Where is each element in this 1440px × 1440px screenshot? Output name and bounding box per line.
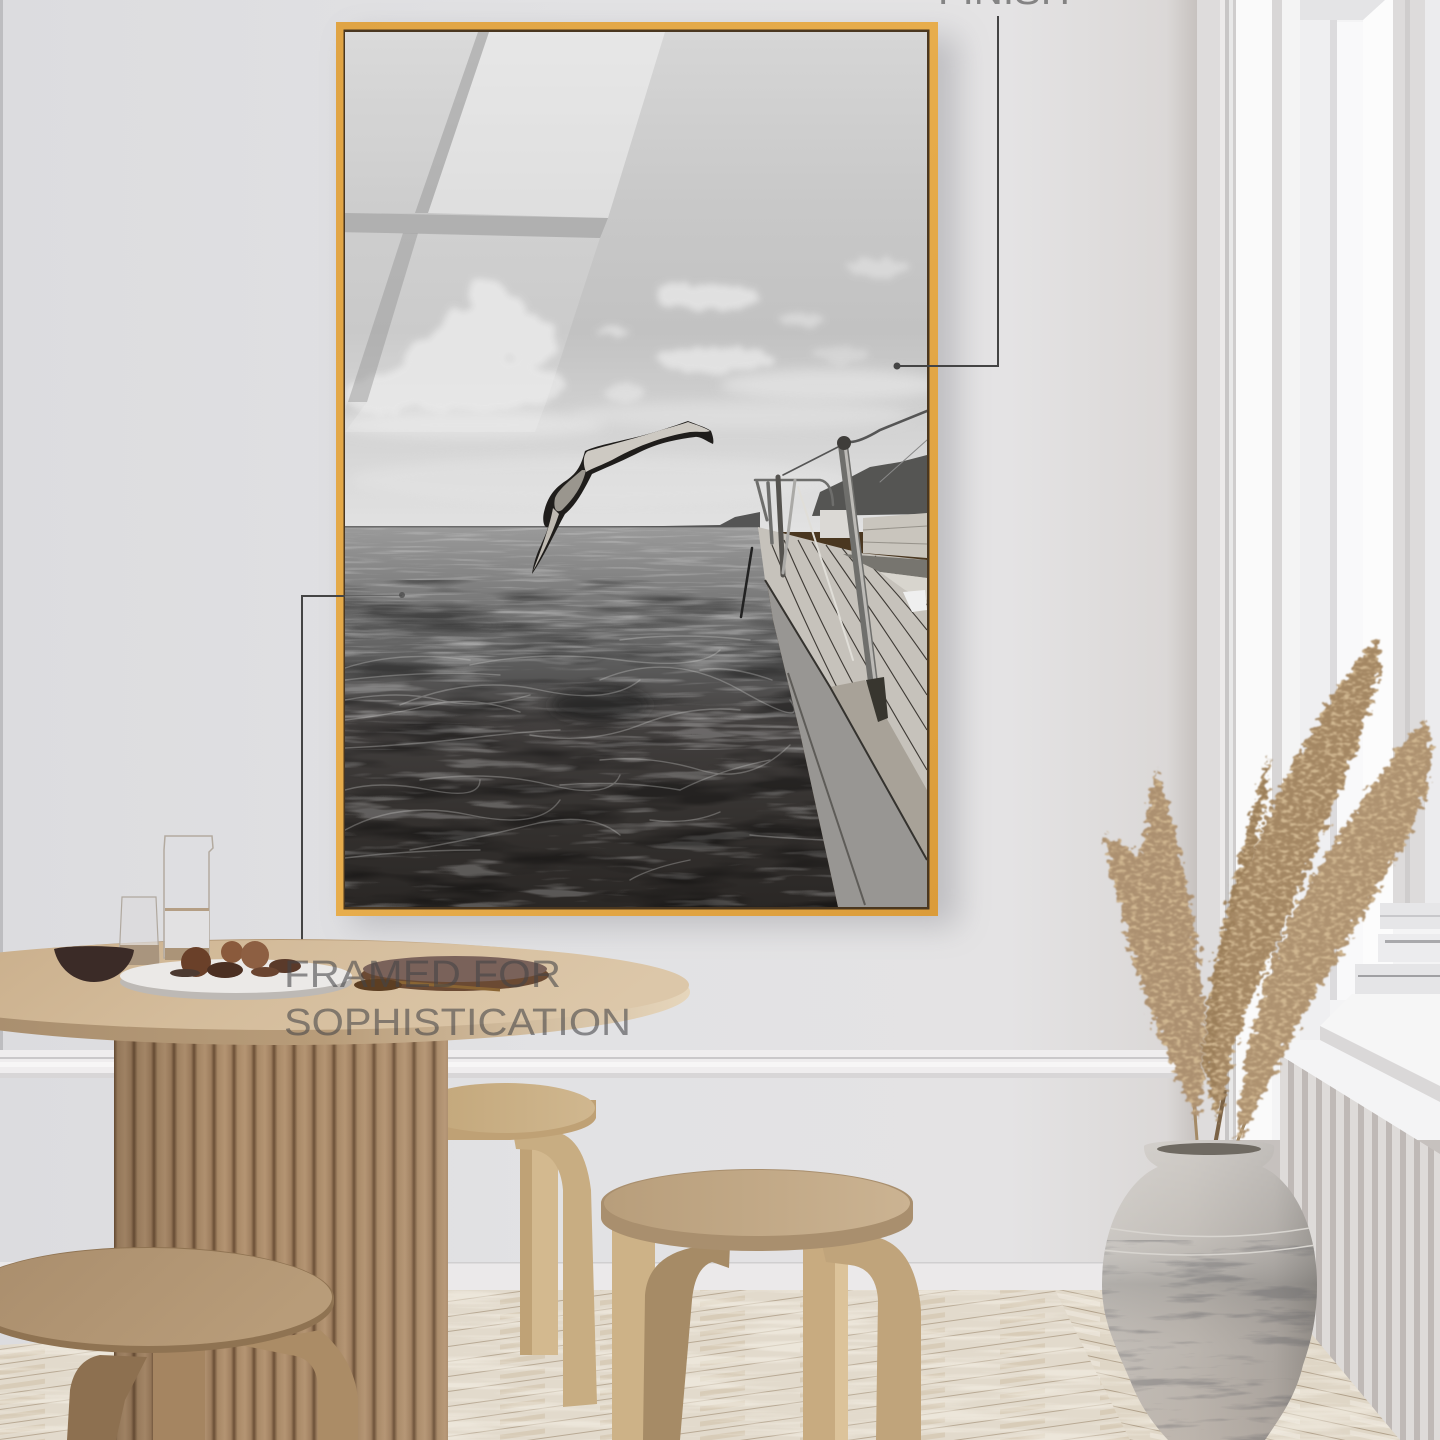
distant headland bbox=[605, 512, 760, 527]
dark inner liner bbox=[344, 30, 930, 910]
callout label: framed for sophistication: SOPHISTICATION bbox=[284, 1002, 631, 1044]
drinking glass bbox=[119, 897, 159, 965]
hull stripe bbox=[788, 673, 865, 905]
bowl bbox=[54, 946, 134, 982]
callout leader: frame bbox=[302, 592, 405, 946]
stone vase bbox=[1100, 1140, 1320, 1440]
floor bbox=[0, 1290, 1400, 1440]
water jug bbox=[164, 836, 213, 960]
photo content bbox=[335, 32, 940, 907]
table edge bbox=[0, 939, 690, 1045]
callout label: framed for sophistication bbox=[284, 954, 631, 1044]
baseboard bbox=[0, 1262, 1278, 1290]
pampas grass plumes bbox=[1105, 636, 1432, 1145]
diver bbox=[532, 421, 713, 574]
window sill bbox=[1320, 994, 1440, 1086]
front left stool bbox=[0, 1247, 358, 1440]
waves bbox=[340, 527, 845, 907]
callout leader: finish bbox=[894, 16, 998, 370]
hull bbox=[768, 586, 927, 907]
teak deck bbox=[758, 527, 927, 860]
books on the window sill bbox=[1355, 934, 1440, 994]
glass reflection bbox=[345, 32, 665, 432]
deck boxes bbox=[820, 510, 927, 558]
callout label: framed for sophistication: FRAMED FOR bbox=[284, 954, 561, 996]
frame shadow bbox=[352, 36, 958, 926]
wooden spoon bbox=[354, 979, 500, 991]
radiator bbox=[1280, 1055, 1440, 1440]
dining table bbox=[0, 939, 690, 1440]
table pedestal bbox=[114, 1030, 448, 1440]
dark serving plate bbox=[361, 956, 549, 991]
rail stanchion bbox=[837, 436, 888, 722]
front right stool bbox=[601, 1169, 921, 1440]
bow railing bbox=[741, 411, 927, 660]
horizon line bbox=[345, 526, 760, 528]
chair rail bbox=[0, 1050, 1180, 1078]
window with white moulding bbox=[1197, 0, 1440, 1140]
outer gold frame bbox=[336, 22, 938, 916]
sill front edge bbox=[1320, 1026, 1440, 1102]
sky bbox=[345, 32, 927, 532]
back stool bbox=[415, 1083, 597, 1407]
clouds bbox=[345, 257, 927, 438]
marble plate with nuts bbox=[120, 941, 352, 1000]
hills bbox=[812, 455, 927, 516]
sea bbox=[345, 527, 845, 907]
framed photograph bbox=[335, 22, 940, 916]
table top bbox=[0, 940, 689, 1030]
